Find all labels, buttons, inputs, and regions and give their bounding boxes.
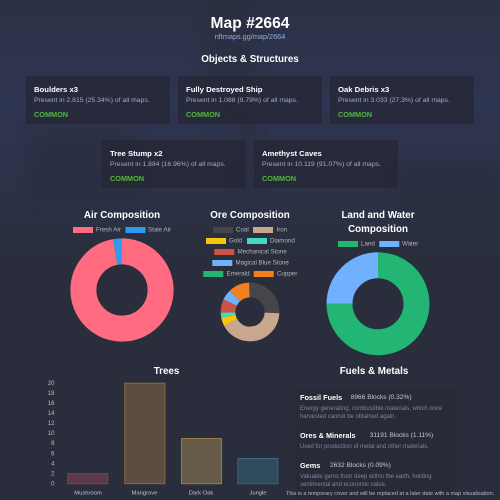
panel: Boulders x3: Boulders x3 (34, 85, 78, 94)
panel: fossil fuels (295, 388, 455, 425)
x axis labels: Mangrove (132, 490, 157, 496)
legend: ore (203, 226, 297, 278)
legend: land and water: Water (402, 240, 418, 248)
legend: ore: Coal (236, 226, 249, 234)
panel: Fully Destroyed Ship (178, 76, 322, 124)
panel: gems: sentimental and economic value. (300, 482, 386, 488)
legend: land and water: Land (361, 240, 375, 248)
panel: Oak Debris x3: Present in 3.033 (27.3%) of all maps. (338, 97, 450, 104)
title: Map #2664 (211, 15, 289, 32)
footer note: This is a temporary cover and will be replaced at a later date with a map visualisation. (286, 491, 494, 497)
panel: fossil fuels: harvested cannot be obtained again. (300, 414, 396, 420)
bar: Jungle (238, 458, 278, 484)
heading: land and water composition: Composition (348, 224, 408, 234)
legend: ore: Emerald (226, 270, 250, 278)
panel: ores and minerals: Ores & Minerals (300, 431, 356, 440)
panel: Tree Stump x2: Present in 1.884 (16.96%) of all maps. (110, 161, 226, 168)
y axis labels: 14 (48, 411, 55, 417)
legend: air (73, 226, 171, 234)
panel: Tree Stump x2: COMMON (110, 174, 144, 183)
heading: air composition: Air Composition (84, 210, 160, 220)
x axis labels: Jungle (249, 490, 267, 496)
panel: Amethyst Caves (254, 140, 398, 188)
x axis labels (74, 490, 267, 496)
panel: Fully Destroyed Ship: Present in 1.088 (9.79%) of all maps. (186, 97, 298, 104)
x axis labels: Dark Oak (189, 490, 213, 496)
panel: Boulders x3: Present in 2.815 (25.34%) of all maps. (34, 97, 150, 104)
legend: air: Fresh Air (96, 226, 121, 234)
heading: fuels and metals: Fuels & Metals (340, 366, 408, 376)
legend: land and water (338, 240, 418, 248)
panel: fossil fuels: Energy generating, combustible materials, which once (300, 406, 442, 412)
panel: Oak Debris x3: Oak Debris x3 (338, 85, 389, 94)
legend: ore: Magical Blue Stone (236, 260, 289, 266)
legend: air: Stale Air (148, 226, 171, 234)
bar: Dark Oak (182, 438, 222, 484)
doughnut: land and water (340, 265, 416, 342)
y axis labels: 16 (48, 401, 55, 407)
panel: Oak Debris x3: COMMON (338, 110, 372, 119)
y axis labels: 0 (51, 482, 55, 488)
panel: Amethyst Caves: COMMON (262, 174, 296, 183)
doughnut: ore (228, 290, 272, 334)
panel: Amethyst Caves: Present in 10.119 (91.07%) of all maps. (262, 161, 381, 168)
y axis labels: 10 (48, 431, 55, 437)
bar: Mushroom (68, 474, 108, 484)
panel: Tree Stump x2: Tree Stump x2 (110, 149, 163, 158)
panel: gems: 2632 Blocks (0.09%) (330, 462, 391, 469)
panel: gems: Gems (300, 461, 320, 470)
x axis labels: Mushroom (74, 490, 102, 496)
y axis labels: 12 (48, 421, 55, 427)
y axis labels: 20 (48, 381, 55, 387)
map link: nftmaps.gg/map/2664 (215, 32, 285, 41)
y axis labels: 4 (51, 462, 55, 468)
heading: land and water composition: Land and Water (341, 210, 415, 220)
doughnut: air (83, 251, 161, 329)
panel: Fully Destroyed Ship: COMMON (186, 110, 220, 119)
y axis labels: 18 (48, 391, 55, 397)
heading: ore composition: Ore Composition (210, 210, 290, 220)
panel: fossil fuels: Fossil Fuels (300, 393, 342, 402)
bar: Mangrove (125, 383, 165, 484)
legend: ore: Iron (276, 226, 288, 234)
legend: ore: Copper (277, 270, 297, 278)
heading: trees: Trees (154, 366, 179, 376)
y axis labels: 6 (51, 452, 55, 458)
panel: Oak Debris x3 (330, 76, 474, 124)
panel: gems (295, 456, 455, 500)
panel: ores and minerals: Used for production of metal and other materials. (300, 444, 429, 450)
legend: ore: Mechanical Stone (238, 248, 287, 256)
bar chart: trees (48, 381, 278, 496)
panel: Boulders x3: COMMON (34, 110, 68, 119)
heading: objects and structures: Objects & Structures (201, 54, 299, 64)
legend: ore: Gold (229, 238, 243, 244)
y axis labels (48, 381, 55, 488)
panel: Boulders x3 (26, 76, 170, 124)
legend: ore: Diamond (270, 238, 295, 244)
panel: fossil fuels: 8966 Blocks (0.32%) (351, 394, 412, 401)
panel: Amethyst Caves: Amethyst Caves (262, 149, 322, 158)
panel: ores and minerals (295, 426, 455, 455)
panel: ores and minerals: 31191 Blocks (1.11%) (370, 432, 433, 439)
heading: land and water composition (341, 210, 415, 234)
y axis labels: 2 (51, 472, 55, 478)
panel: Fully Destroyed Ship: Fully Destroyed Ship (186, 85, 262, 94)
panel: gems: Valuable gems from deep within the earth, holding (300, 474, 432, 480)
y axis labels: 8 (51, 441, 55, 447)
panel: Tree Stump x2 (102, 140, 246, 188)
